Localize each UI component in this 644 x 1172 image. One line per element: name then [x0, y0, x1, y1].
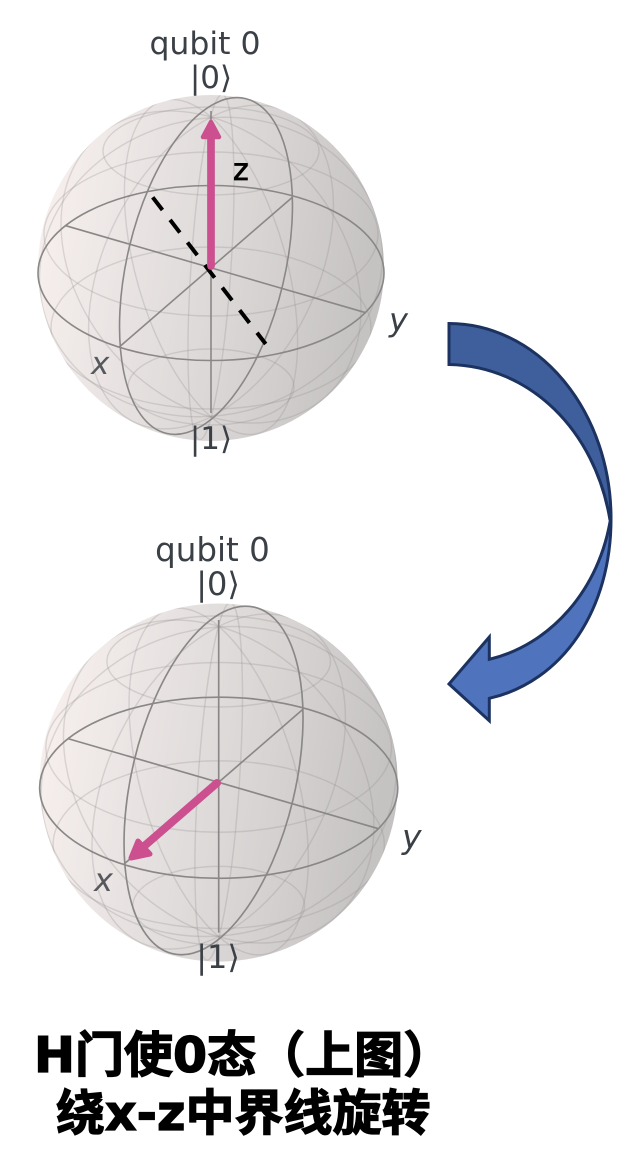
label: x: x	[90, 346, 110, 382]
label: z: z	[233, 153, 249, 188]
label: x: x	[93, 861, 114, 899]
caption	[34, 1027, 452, 1142]
caption line 1: H门使0态（上图）	[34, 1027, 452, 1084]
panel: bottom Bloch sphere	[0, 531, 438, 1005]
label: y: y	[388, 301, 409, 339]
state vector arrow: z	[203, 122, 219, 266]
arrow upper half	[449, 324, 611, 520]
state vector arrow: x	[131, 783, 217, 858]
label: ket 0: |0⟩	[190, 60, 232, 96]
panel: top Bloch sphere	[0, 26, 423, 483]
sphere wireframe: bottom	[0, 558, 438, 1005]
label: y: y	[401, 817, 422, 856]
label: qubit 0: qubit 0	[149, 26, 261, 62]
dashed rotation axis	[153, 197, 266, 344]
sphere wireframe: top	[0, 51, 423, 483]
curved arrow	[449, 324, 611, 721]
label: ket 1: |1⟩	[190, 421, 232, 457]
arrow lower half with head	[449, 516, 611, 721]
label: ket 0: |0⟩	[196, 565, 240, 603]
label: ket 1: |1⟩	[196, 938, 240, 976]
label: qubit 0: qubit 0	[155, 531, 270, 569]
caption line 2: 绕x-z中界线旋转	[56, 1085, 430, 1142]
